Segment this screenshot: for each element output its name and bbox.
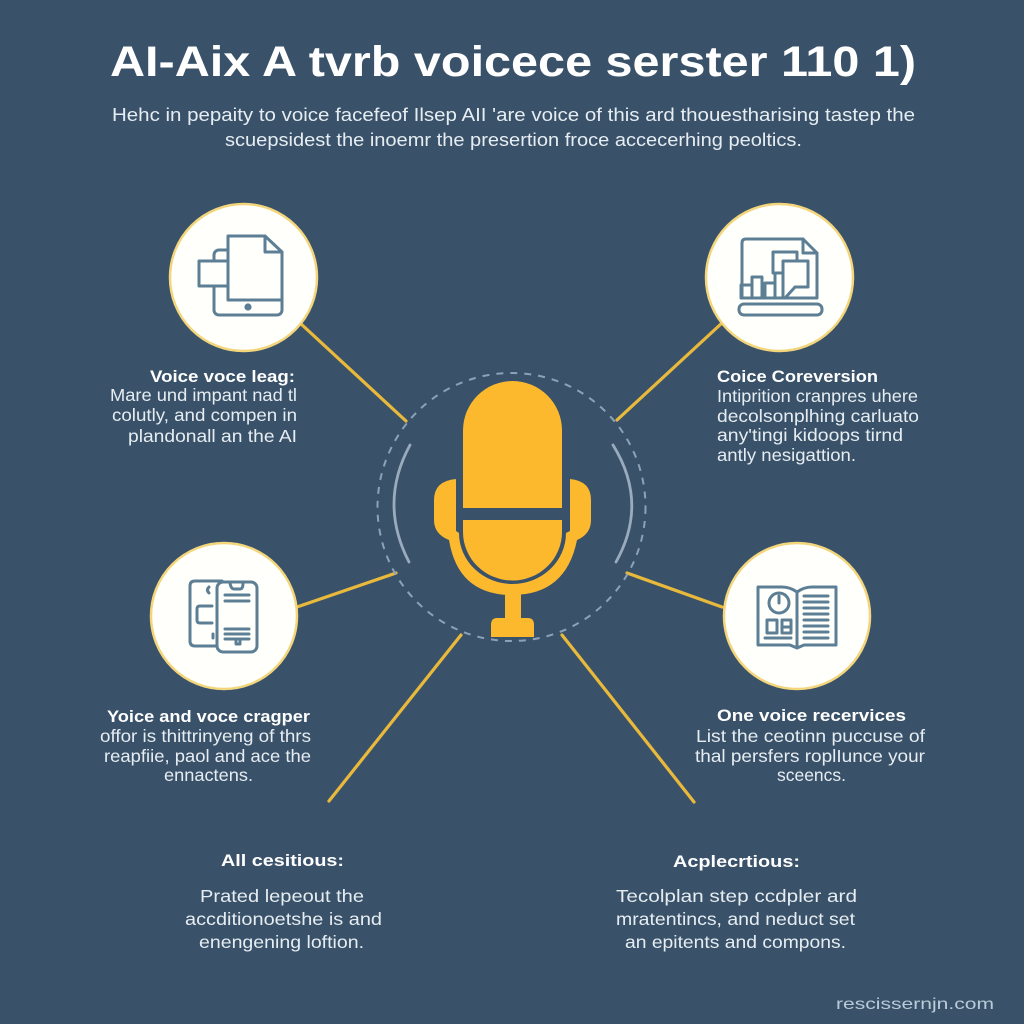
text: one voice recervices: List the ceotinn puccuse of [696, 726, 925, 746]
subtitle: scuepsidest the inoemr the presertion froce accecerhing peoltics. [225, 130, 802, 150]
text: coice coreversion: antly nesigattion. [717, 445, 856, 465]
icon: laptop with charts [706, 204, 853, 351]
text block: acplecrtious: an epitents and compons. [625, 932, 846, 952]
subtitle [112, 105, 915, 150]
text block: all cesitious [185, 851, 382, 952]
text block: all cesitious: accditionoetshe is and [185, 909, 382, 929]
text: voice voce leag: Voice voce leag: [150, 367, 295, 386]
panel: middle right [695, 543, 925, 785]
panel: top right [706, 204, 919, 465]
footer url: rescissernjn.com [836, 996, 994, 1013]
text block: acplecrtious: mratentincs, and neduct set [616, 909, 855, 929]
text: coice coreversion: decolsonplhing carluato [717, 406, 919, 426]
text block: acplecrtious: Acplecrtious: [673, 852, 800, 871]
text: one voice recervices: One voice recervices [717, 706, 906, 725]
text: yoice and voce cragper [100, 707, 311, 785]
text block: acplecrtious [616, 852, 857, 952]
text: yoice and voce cragper: Yoice and voce cragper [107, 707, 310, 726]
text block: acplecrtious: Tecolplan step ccdpler ard [616, 886, 857, 906]
text: yoice and voce cragper: offor is thittrinyeng of thrs [100, 726, 311, 746]
text: yoice and voce cragper: reapfiie, paol and ace the [104, 746, 311, 766]
panel: top left [110, 204, 317, 446]
central microphone emblem [378, 373, 646, 641]
text block: all cesitious: enengening loftion. [199, 932, 364, 952]
connector lines [297, 323, 722, 802]
text block: all cesitious: All cesitious: [221, 851, 344, 870]
text: one voice recervices [695, 706, 925, 785]
text block: all cesitious: Prated lepeout the [200, 886, 364, 906]
text: voice voce leag [110, 367, 297, 446]
panel: middle left [100, 543, 311, 785]
text: coice coreversion [717, 367, 919, 465]
sound arcs [394, 445, 632, 562]
text: yoice and voce cragper: ennactens. [164, 765, 253, 785]
text: one voice recervices: sceencs. [777, 765, 846, 785]
title: AI-Aix A tvrb voicece serster 110 1) [110, 38, 916, 86]
icon: microphone [434, 381, 591, 637]
text: coice coreversion: any'tingi kidoops tirnd [717, 425, 903, 445]
text: one voice recervices: thal persfers roplIunce your [695, 746, 925, 766]
text: voice voce leag: Mare und impant nad tl [110, 385, 297, 405]
text: voice voce leag: colutly, and compen in [112, 405, 297, 425]
subtitle: Hehc in pepaity to voice facefeof Ilsep AII 'are voice of this ard thouestharising tastep the [112, 105, 915, 125]
icon: two phones [151, 543, 297, 689]
text: coice coreversion: Intiprition cranpres uhere [717, 386, 918, 406]
icon: tablet and document [170, 204, 317, 351]
text: voice voce leag: plandonall an the AI [128, 426, 297, 446]
icon: open book [724, 543, 870, 689]
dashed ring [378, 373, 646, 641]
text: coice coreversion: Coice Coreversion [717, 367, 878, 386]
